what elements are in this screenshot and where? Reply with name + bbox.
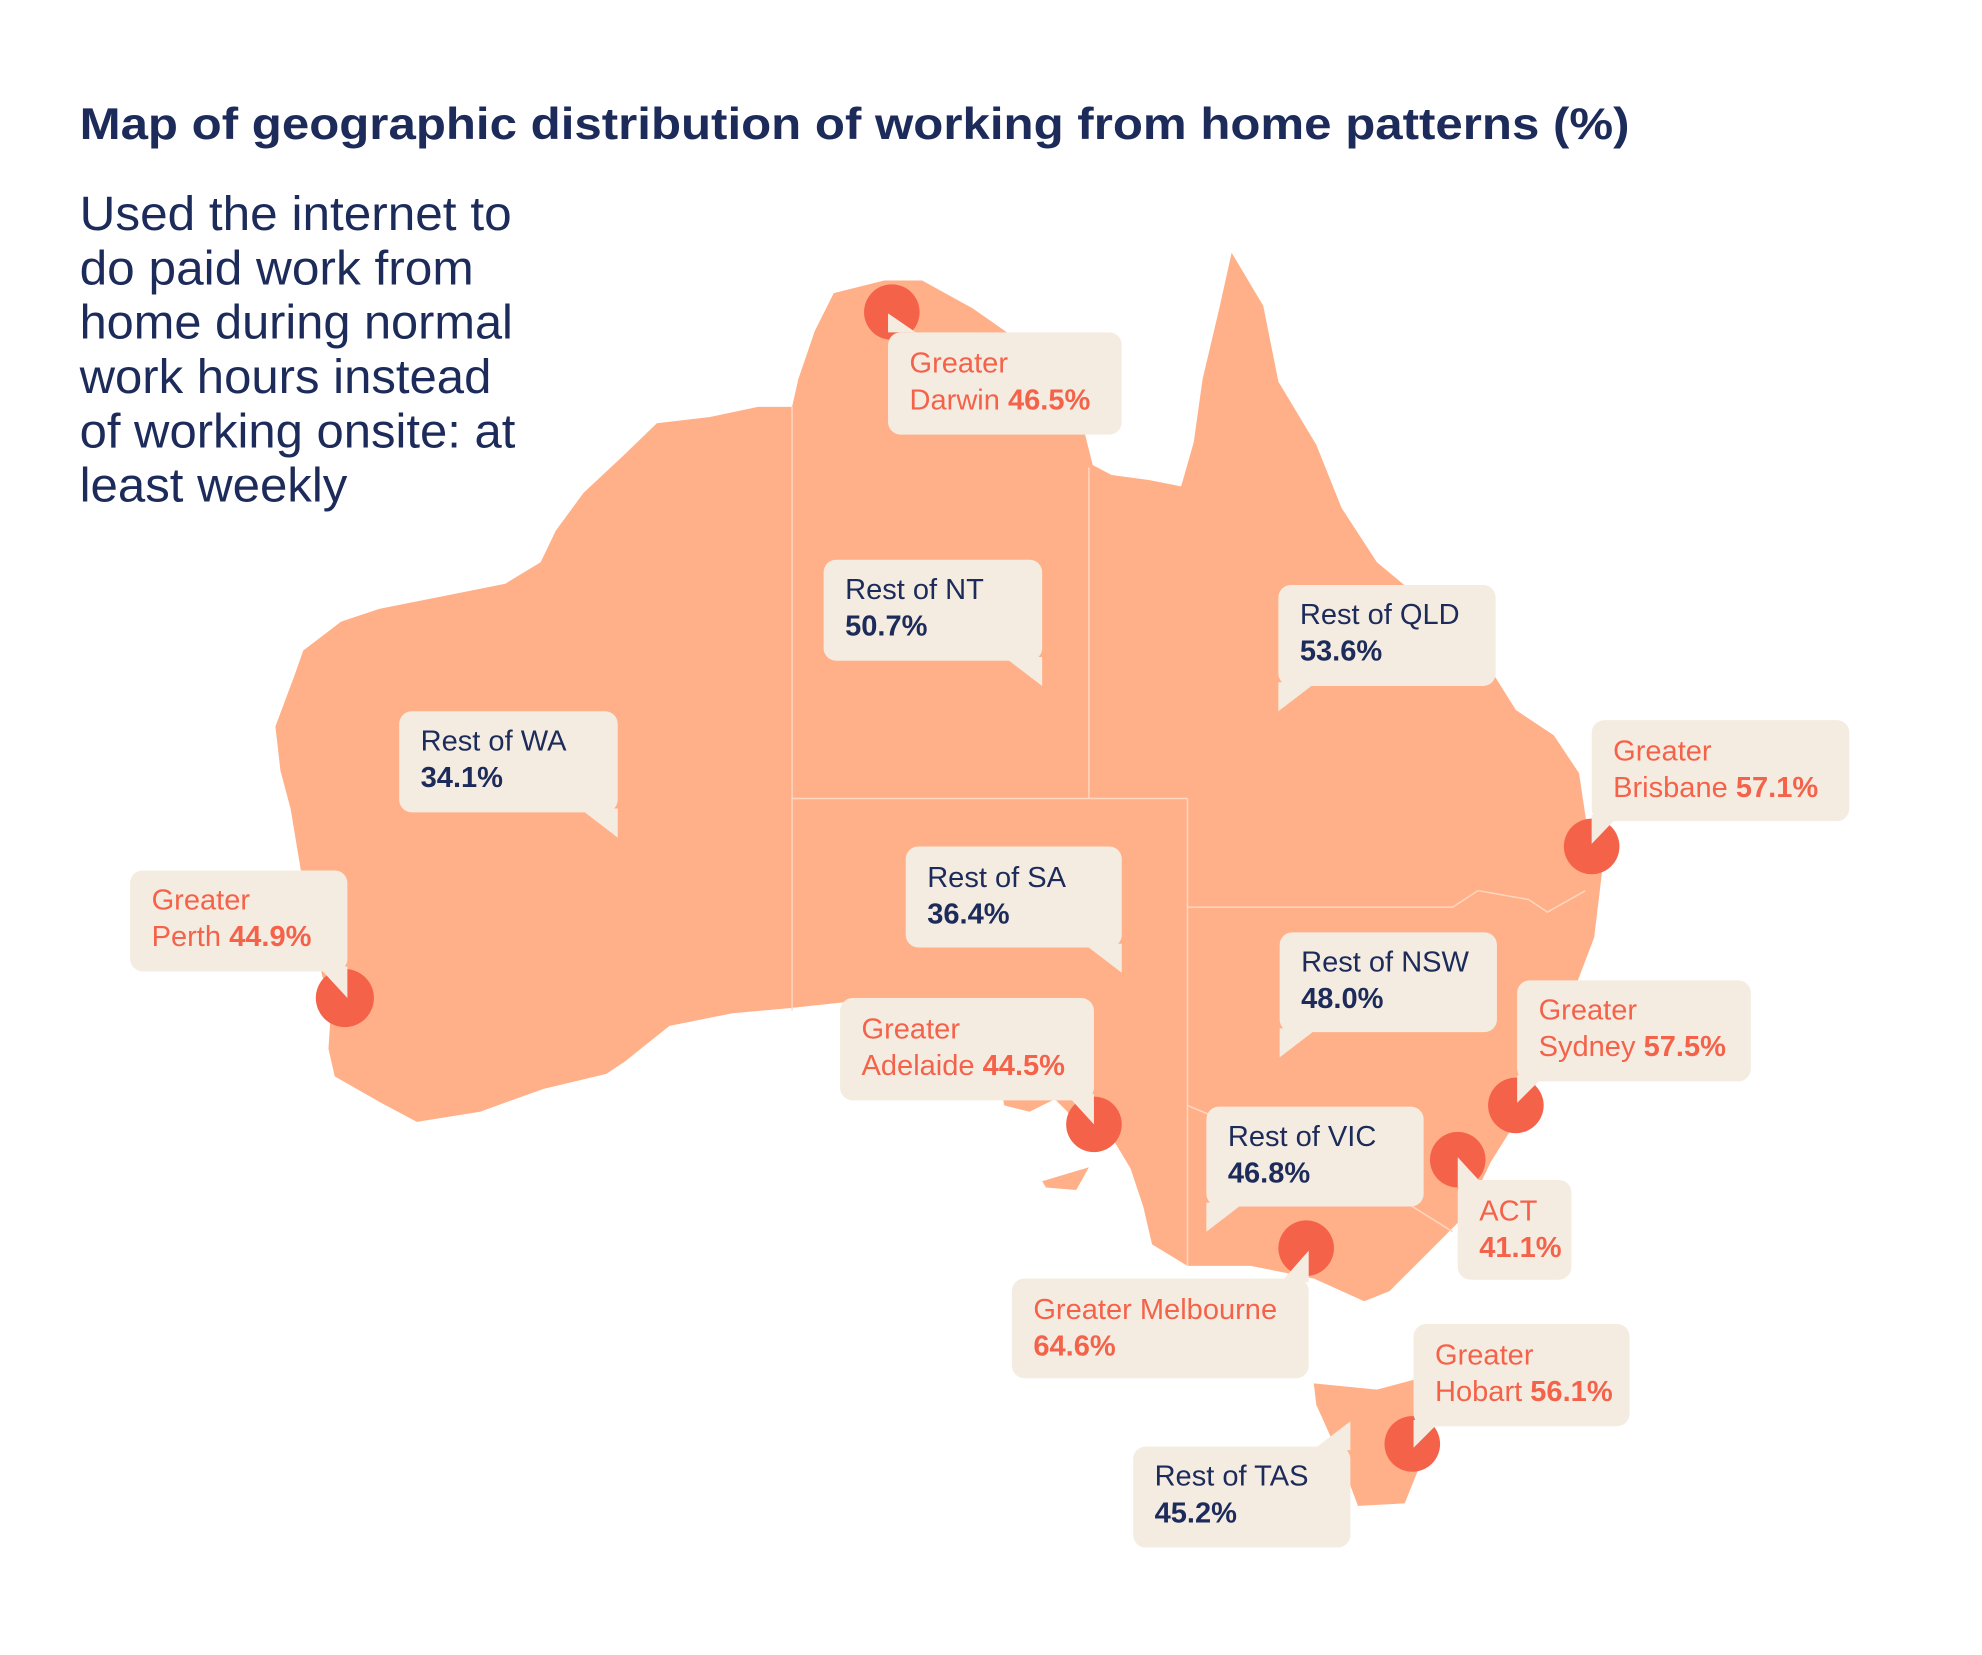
callout: Greater Adelaide	[840, 998, 1122, 1152]
subtitle text block: Used the internet to	[80, 188, 512, 241]
callout: Greater Melbourne: 64.6%	[1033, 1331, 1116, 1363]
callout: Rest of TAS	[1133, 1421, 1350, 1548]
callout: Rest of NT	[824, 560, 1042, 686]
callout: Greater Melbourne: Greater Melbourne	[1033, 1294, 1277, 1326]
callout: ACT: ACT	[1479, 1195, 1538, 1227]
callout: Greater Sydney: Greater	[1539, 995, 1637, 1027]
callout: Rest of TAS: Rest of TAS	[1155, 1461, 1308, 1493]
map: Australia	[275, 253, 1602, 1506]
callout: Greater Perth: Perth 44.9%	[152, 921, 312, 953]
subtitle text block: least weekly	[80, 460, 347, 513]
callout: Rest of WA	[399, 711, 618, 838]
callout: Rest of VIC: Rest of VIC	[1228, 1121, 1376, 1153]
callout: ACT: 41.1%	[1479, 1232, 1562, 1264]
callout: Greater Melbourne	[1012, 1220, 1334, 1378]
callout: Greater Brisbane	[1564, 720, 1849, 874]
callout: Rest of NT: 50.7%	[845, 610, 928, 642]
title: Map of geographic distribution of working from home patterns (%)	[80, 100, 1630, 149]
callout: Greater Hobart: Greater	[1435, 1339, 1534, 1371]
callout: Rest of WA: 34.1%	[421, 762, 503, 794]
callout: Greater Adelaide: Adelaide 44.5%	[862, 1050, 1065, 1082]
callout: Greater Darwin	[864, 284, 1122, 435]
callout: Greater Sydney: Sydney 57.5%	[1539, 1031, 1726, 1063]
callout: Greater Perth: Greater	[152, 885, 250, 917]
callout: Rest of QLD: 53.6%	[1300, 636, 1382, 668]
callout: Greater Darwin: Greater	[910, 348, 1008, 380]
callout: Rest of SA: 36.4%	[927, 899, 1010, 931]
callout: Greater Brisbane: Greater	[1613, 736, 1712, 768]
callout: ACT	[1430, 1132, 1571, 1280]
callout: Greater Brisbane: Brisbane 57.1%	[1613, 772, 1818, 804]
callout: Greater Darwin: Darwin 46.5%	[910, 384, 1091, 416]
callout: Rest of SA: Rest of SA	[927, 862, 1067, 894]
callout: Greater Hobart: Hobart 56.1%	[1435, 1376, 1613, 1408]
callout: Rest of QLD	[1278, 585, 1496, 711]
callout: Rest of NSW	[1280, 932, 1497, 1057]
subtitle text block: do paid work from	[80, 242, 474, 295]
subtitle text block: of working onsite: at	[80, 405, 515, 458]
callout: Rest of QLD: Rest of QLD	[1300, 599, 1460, 631]
callout: Rest of TAS: 45.2%	[1155, 1497, 1237, 1529]
callout: Greater Sydney	[1488, 980, 1751, 1133]
callout: Greater Perth	[130, 870, 374, 1027]
callout: Rest of VIC: 46.8%	[1228, 1157, 1310, 1189]
subtitle text block: work hours instead	[79, 351, 491, 404]
callout: Greater Hobart	[1384, 1324, 1630, 1472]
callout: Rest of NSW: Rest of NSW	[1301, 947, 1470, 979]
callout: Rest of SA	[906, 846, 1122, 973]
subtitle text block	[79, 188, 515, 513]
subtitle text block: home during normal	[80, 297, 513, 350]
callout: Rest of NT: Rest of NT	[845, 574, 984, 606]
callout: Rest of VIC	[1206, 1107, 1424, 1232]
callout: Rest of NSW: 48.0%	[1301, 983, 1384, 1015]
callout: Greater Adelaide: Greater	[862, 1013, 960, 1045]
callout: Rest of WA: Rest of WA	[421, 725, 567, 757]
